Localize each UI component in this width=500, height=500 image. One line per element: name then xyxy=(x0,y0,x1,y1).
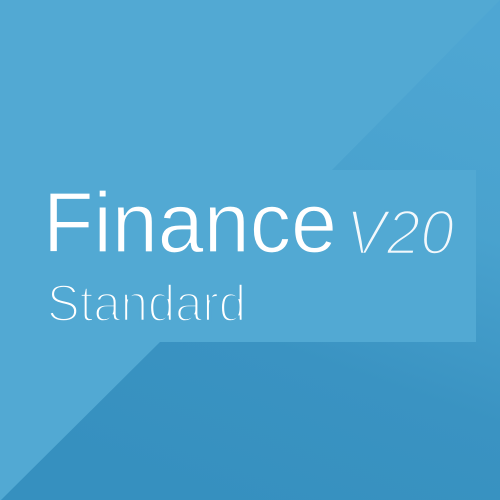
version: V20: V20 xyxy=(346,198,454,268)
subtitle: Standard: Standard xyxy=(47,275,246,333)
title: Finance: Finance xyxy=(43,176,337,271)
